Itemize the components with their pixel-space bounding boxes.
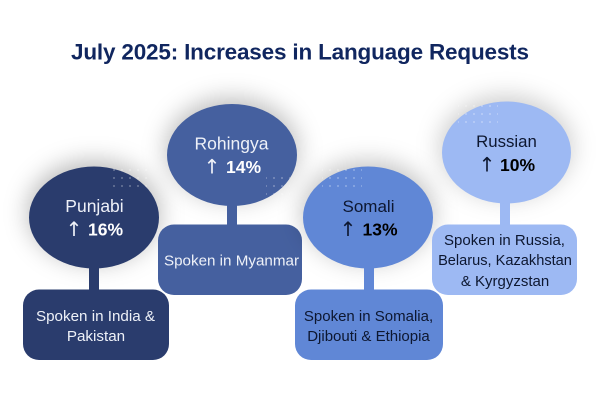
panel: Somali <box>295 161 443 360</box>
box: Rohingya regions <box>158 224 302 295</box>
circle: Punjabi: Punjabi <box>65 196 124 216</box>
panel: Russian <box>432 96 577 295</box>
box: Rohingya regions: Spoken in Myanmar <box>164 252 299 270</box>
panel: Rohingya <box>158 98 302 295</box>
box: Russian regions: Spoken in Russia, <box>444 232 565 249</box>
circle: Somali: 13% <box>362 220 398 240</box>
box: Russian regions: Belarus, Kazakhstan <box>438 253 572 269</box>
circle: Rohingya: Rohingya <box>195 134 269 154</box>
circle: Somali: Somali <box>343 197 394 216</box>
circle: Rohingya: ↑ <box>204 154 220 178</box>
circle: Punjabi <box>29 166 159 268</box>
circle: Punjabi: ↑ <box>66 217 82 241</box>
circle: Russian: Russian <box>476 132 537 151</box>
box: Somali regions <box>295 290 443 360</box>
circle: Somali: ↑ <box>340 217 356 241</box>
box: Somali regions: Spoken in Somalia, <box>304 308 433 325</box>
box: Somali regions: Djibouti & Ethiopia <box>307 328 430 345</box>
box: Punjabi regions <box>23 290 169 360</box>
circle: Russian: ↑ <box>479 152 495 176</box>
box: Punjabi regions: Spoken in India & <box>36 308 155 325</box>
circle: Punjabi: 16% <box>88 220 123 240</box>
circle: Rohingya: 14% <box>226 157 261 177</box>
box: Punjabi regions: Pakistan <box>67 328 125 345</box>
circle: Russian <box>442 102 571 204</box>
box: Russian regions: & Kyrgyzstan <box>461 273 549 290</box>
circle: Rohingya <box>167 104 297 206</box>
box: Russian regions <box>432 224 577 295</box>
circle: Russian: 10% <box>500 155 535 175</box>
circle: Somali <box>303 166 433 268</box>
title: July 2025: Increases in Language Requests <box>71 40 529 64</box>
panel: Punjabi <box>23 161 169 360</box>
